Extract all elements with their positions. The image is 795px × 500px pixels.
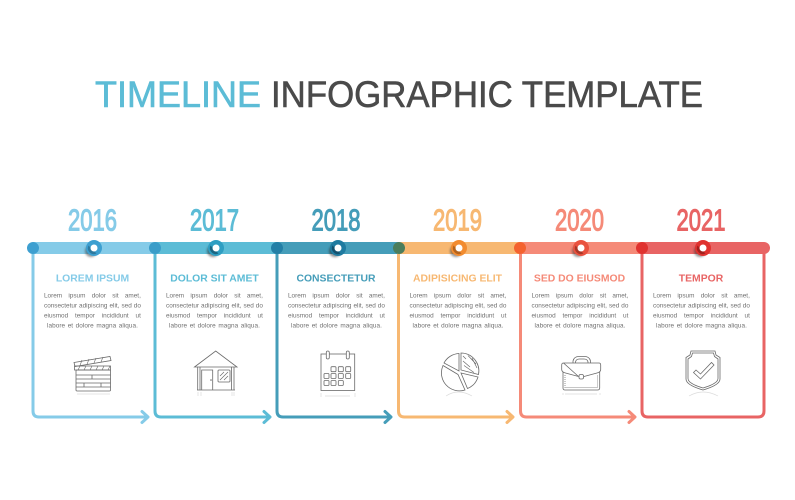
text 2021: labore et dolore magna aliqua. xyxy=(656,322,747,330)
text 2020: labore et dolore magna aliqua. xyxy=(535,322,626,330)
marker 2021 xyxy=(694,240,711,257)
heading 2016: LOREM IPSUM xyxy=(56,274,129,284)
panel: 2020 xyxy=(514,202,635,422)
year 2018: 2018 xyxy=(312,202,360,238)
text 2016 xyxy=(44,292,141,330)
text 2019: consectetur adipiscing elit, sed do xyxy=(410,302,507,310)
node 2019 xyxy=(393,242,405,254)
text 2020: consectetur adipiscing elit, sed do xyxy=(532,302,629,310)
icon: house xyxy=(194,351,237,396)
text 2016: consectetur adipiscing elit, sed do xyxy=(44,302,141,310)
text 2017: Lorem ipsum dolor sit amet, xyxy=(166,292,263,300)
text 2020 xyxy=(532,292,629,330)
heading 2017: DOLOR SIT AMET xyxy=(170,274,259,284)
heading 2021: TEMPOR xyxy=(679,274,724,284)
year 2017: 2017 xyxy=(190,202,239,238)
card outline 2019 xyxy=(398,248,513,422)
marker 2017 xyxy=(207,240,224,257)
icon: shield xyxy=(686,351,720,396)
heading 2019: ADIPISICING ELIT xyxy=(413,274,503,284)
icon: clapperboard xyxy=(74,356,111,394)
year 2019: 2019 xyxy=(433,202,482,238)
text 2019 xyxy=(410,292,507,330)
text 2016: eiusmod tempor incididunt ut xyxy=(44,312,141,320)
text 2020: Lorem ipsum dolor sit amet, xyxy=(532,292,629,300)
text 2021: eiusmod tempor incididunt ut xyxy=(653,312,750,320)
text 2017: consectetur adipiscing elit, sed do xyxy=(166,302,263,310)
panel: 2019 xyxy=(393,202,513,422)
card outline 2018 xyxy=(277,248,391,422)
text 2016: labore et dolore magna aliqua. xyxy=(47,322,138,330)
node 2016 xyxy=(27,242,39,254)
text 2018: consectetur adipiscing elit, sed do xyxy=(288,302,385,310)
year 2020: 2020 xyxy=(555,202,604,238)
marker 2018 xyxy=(329,240,346,257)
text 2017 xyxy=(166,292,263,330)
icon: calendar xyxy=(321,351,355,397)
panel: 2016 xyxy=(27,202,148,422)
icon: briefcase xyxy=(562,356,601,395)
text 2021: consectetur adipiscing elit, sed do xyxy=(653,302,750,310)
node 2017 xyxy=(149,242,161,254)
title: INFOGRAPHIC TEMPLATE xyxy=(271,74,703,115)
text 2021 xyxy=(653,292,750,330)
year 2021: 2021 xyxy=(676,202,726,238)
text 2018: Lorem ipsum dolor sit amet, xyxy=(288,292,385,300)
text 2019: eiusmod tempor incididunt ut xyxy=(410,312,507,320)
card outline 2020 xyxy=(520,248,635,422)
text 2017: labore et dolore magna aliqua. xyxy=(169,322,260,330)
text 2017: eiusmod tempor incididunt ut xyxy=(166,312,263,320)
icon: pie chart xyxy=(441,353,479,396)
title xyxy=(95,74,703,115)
text 2020: eiusmod tempor incididunt ut xyxy=(532,312,629,320)
text 2019: Lorem ipsum dolor sit amet, xyxy=(410,292,507,300)
card outline 2021 xyxy=(642,248,764,417)
node 2018 xyxy=(271,242,283,254)
panel: 2018 xyxy=(271,202,391,422)
heading 2020: SED DO EIUSMOD xyxy=(534,274,626,284)
marker 2016 xyxy=(85,240,102,257)
heading 2018: CONSECTETUR xyxy=(296,274,376,284)
title: TIMELINE xyxy=(95,74,261,115)
text 2018 xyxy=(288,292,385,330)
text 2018: labore et dolore magna aliqua. xyxy=(291,322,382,330)
panel: 2021 xyxy=(636,202,764,417)
panel: 2017 xyxy=(149,202,270,422)
timeline bar xyxy=(33,242,770,254)
text 2018: eiusmod tempor incididunt ut xyxy=(288,312,385,320)
node 2021 xyxy=(636,242,648,254)
year 2016: 2016 xyxy=(68,202,117,238)
text 2021: Lorem ipsum dolor sit amet, xyxy=(653,292,750,300)
text 2019: labore et dolore magna aliqua. xyxy=(413,322,504,330)
text 2016: Lorem ipsum dolor sit amet, xyxy=(44,292,141,300)
node 2020 xyxy=(514,242,526,254)
card outline 2017 xyxy=(155,248,270,422)
marker 2020 xyxy=(572,240,589,257)
marker 2019 xyxy=(450,240,467,257)
card outline 2016 xyxy=(33,248,148,422)
